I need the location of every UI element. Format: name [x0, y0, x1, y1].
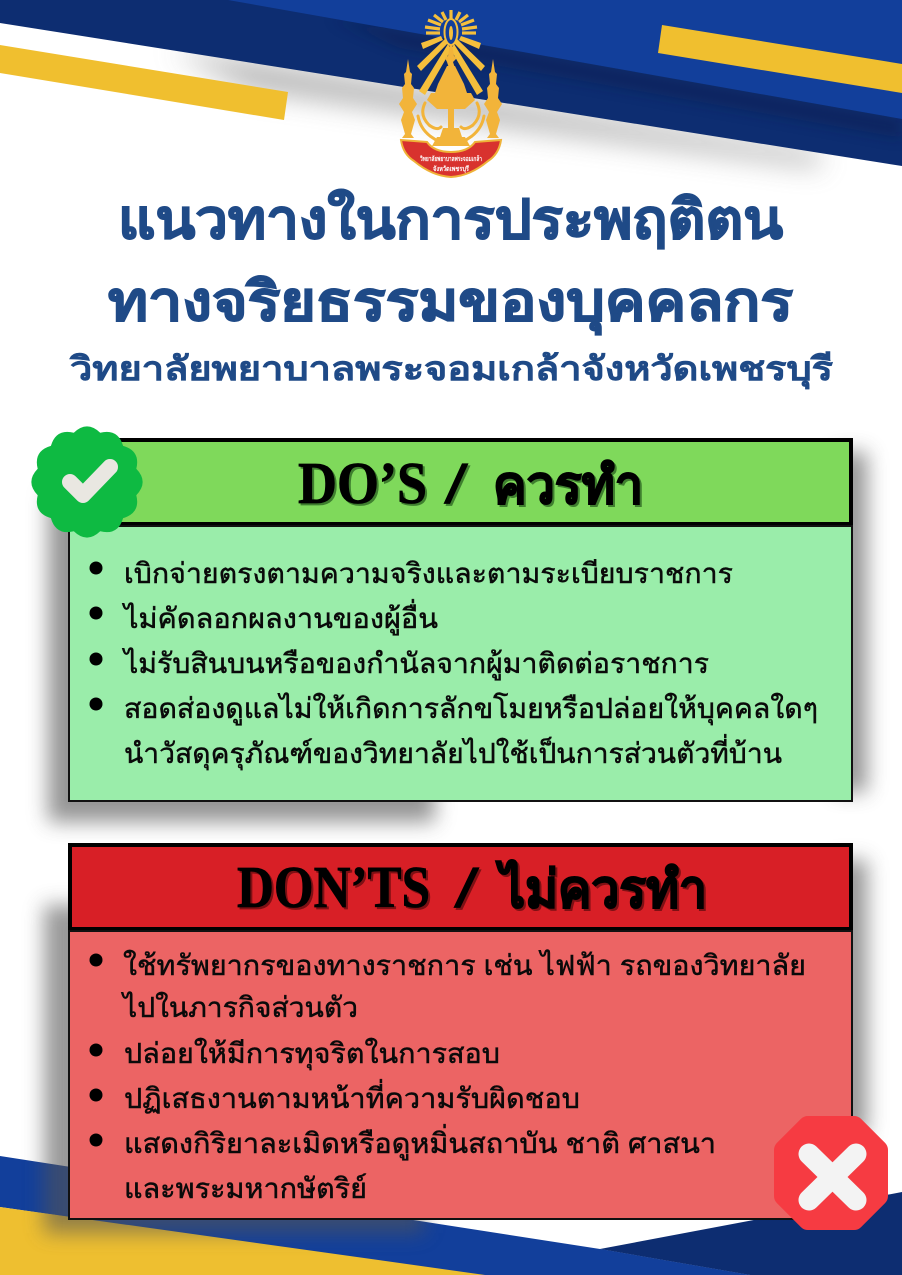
don'ts list: และพระมหากษัตริย์ — [124, 1173, 367, 1204]
don'ts list: ปล่อยให้มีการทุจริตในการสอบ — [124, 1037, 500, 1071]
don'ts list: แสดงกิริยาละเมิดหรือดูหมิ่นสถาบัน ชาติ ศาสนา — [124, 1124, 716, 1161]
do's list: สอดส่องดูแลไม่ให้เกิดการลักขโมยหรือปล่อยให้บุคคลใดๆ — [124, 692, 818, 726]
do's list: ไม่คัดลอกผลงานของผู้อื่น — [122, 599, 438, 636]
don'ts header — [70, 845, 851, 929]
don'ts list — [90, 949, 806, 1204]
don'ts heading: / — [456, 856, 481, 922]
do's heading: ควรทำ — [495, 459, 645, 517]
don'ts heading: ไม่ควรทำ — [497, 861, 709, 921]
title: line 1: แนวทางในการประพฤติตน — [118, 188, 783, 250]
logo rays — [425, 10, 477, 33]
don'ts list: ใช้ทรัพยากรของทางราชการ เช่น ไฟฟ้า รถของวิทยาลัย — [123, 949, 806, 981]
do's list: ไม่รับสินบนหรือของกำนัลจากผู้มาติดต่อราชการ — [122, 648, 709, 681]
icon: red cross badge — [784, 1126, 878, 1220]
accent bar: top left yellow — [0, 45, 288, 120]
background: top banner — [0, 0, 902, 166]
logo side towers — [399, 59, 502, 138]
do's list — [90, 558, 818, 771]
do's heading: / — [444, 450, 468, 516]
don'ts heading: ไม่ควรทำ — [495, 859, 707, 919]
accent bar: top right yellow — [658, 25, 902, 93]
don'ts list: ปฏิเสธงานตามหน้าที่ความรับผิดชอบ — [124, 1079, 580, 1114]
title: line 2: ทางจริยธรรมของบุคคลกร — [108, 272, 793, 336]
do's list: เบิกจ่ายตรงตามความจริงและตามระเบียบราชการ — [124, 558, 733, 589]
do's heading: ควรทำ — [493, 457, 643, 515]
do's heading — [298, 450, 645, 518]
don'ts heading — [237, 854, 709, 922]
logo pagoda — [427, 44, 475, 146]
do's header — [70, 440, 851, 524]
don'ts heading: DON’TS — [239, 856, 432, 922]
logo banner — [401, 140, 501, 177]
logo: college emblem — [399, 10, 502, 177]
don'ts list: ไปในภารกิจส่วนตัว — [121, 991, 358, 1023]
do's heading: DO’S — [300, 452, 429, 518]
background: bottom banner — [0, 1156, 902, 1275]
do's heading: / — [446, 452, 470, 518]
panel: don'ts — [44, 845, 867, 1233]
logo: college emblem: จังหวัดเพชรบุรี — [433, 165, 469, 173]
don'ts heading: DON’TS — [237, 854, 430, 920]
do's body — [69, 526, 852, 801]
logo scrolls — [418, 103, 484, 140]
don'ts body — [69, 931, 852, 1219]
do's list: นำวัสดุครุภัณฑ์ของวิทยาลัยไปใช้เป็นการส่วนตัวที่บ้าน — [124, 734, 782, 771]
do's heading: DO’S — [298, 450, 427, 516]
logo: college emblem: วิทยาลัยพยาบาลพระจอมเกล้า — [419, 154, 482, 163]
panel: do's — [48, 440, 867, 822]
icon: green check badge — [31, 426, 143, 538]
don'ts heading: / — [454, 854, 479, 920]
subtitle: วิทยาลัยพยาบาลพระจอมเกล้าจังหวัดเพชรบุรี — [69, 350, 833, 390]
